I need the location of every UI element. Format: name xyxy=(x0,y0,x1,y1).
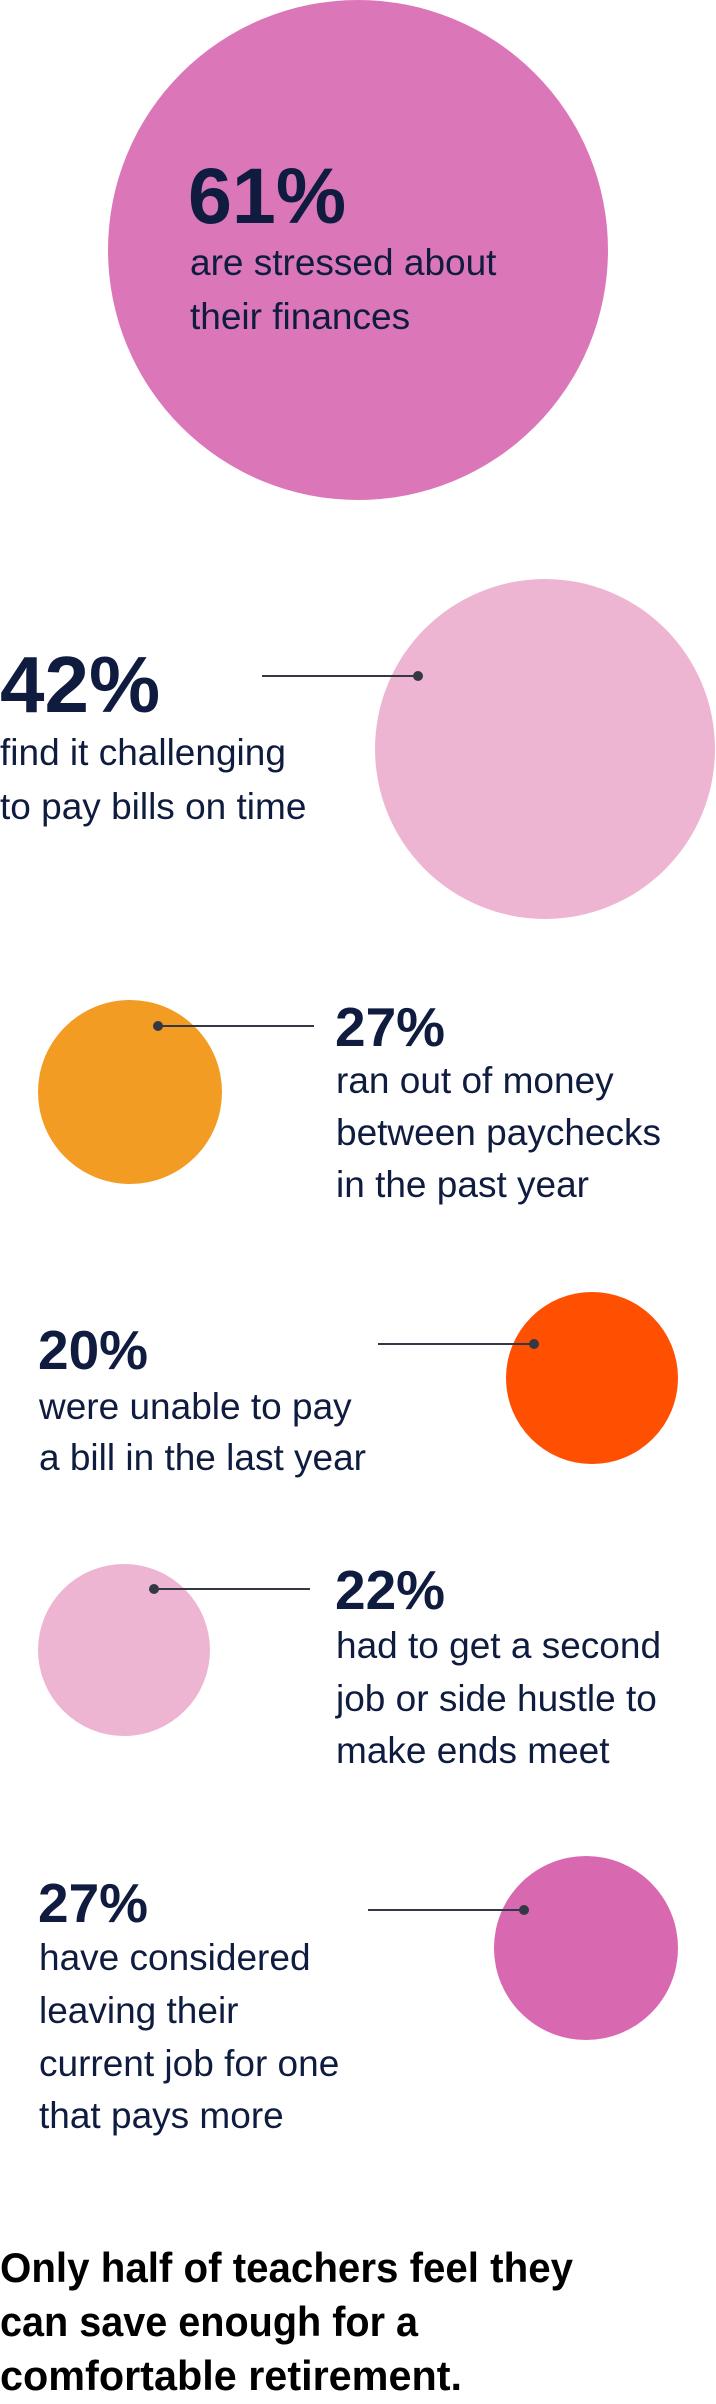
text: 61%: are stressed about xyxy=(190,242,497,283)
text: 22%: job or side hustle to xyxy=(335,1678,657,1719)
text: 27% leaving: leaving their xyxy=(39,1990,239,2031)
text: 27% leaving: current job for one xyxy=(39,2043,339,2084)
text: 27% leaving: that pays more xyxy=(39,2095,284,2136)
text: 27% leaving: 27% xyxy=(38,1872,148,1934)
stat: 22% xyxy=(38,1559,661,1771)
connector line: red xyxy=(378,1339,539,1349)
text: 27%: between paychecks xyxy=(336,1112,661,1153)
text: 42%: find it challenging xyxy=(0,732,286,773)
text: 20% xyxy=(38,1319,366,1478)
stat: 42% xyxy=(0,579,715,919)
text: 42% xyxy=(0,640,306,827)
text: 27% leaving: have considered xyxy=(39,1937,311,1978)
text: 27% xyxy=(335,996,661,1205)
footer statement xyxy=(0,2244,574,2399)
text: 27% leaving xyxy=(38,1872,339,2136)
stat: 61% xyxy=(108,0,608,500)
text: 22% xyxy=(335,1559,661,1771)
text: 20%: were unable to pay xyxy=(38,1386,352,1427)
stat: 27% leaving xyxy=(38,1856,678,2136)
stat: 27% ran out xyxy=(38,996,661,1205)
connector line: 42% xyxy=(262,671,423,681)
connector line: light pink xyxy=(149,1584,310,1594)
text: 42%: to pay bills on time xyxy=(0,786,306,827)
text: 27%: ran out of money xyxy=(336,1060,614,1101)
footer statement: Only half of teachers feel they xyxy=(0,2244,574,2291)
text: 22%: had to get a second xyxy=(336,1625,661,1666)
circle: red xyxy=(506,1292,678,1464)
connector line: orange xyxy=(153,1021,314,1031)
text: 20%: a bill in the last year xyxy=(39,1437,366,1478)
footer statement: can save enough for a xyxy=(0,2298,419,2345)
connector line: magenta xyxy=(368,1905,529,1915)
text: 61%: their finances xyxy=(190,296,410,337)
circle: orange xyxy=(38,1000,222,1184)
circle: 61% xyxy=(108,0,608,500)
text: 27%: in the past year xyxy=(336,1164,589,1205)
text: 22%: make ends meet xyxy=(336,1730,610,1771)
text: 61% xyxy=(188,151,497,337)
text: 42%: 42% xyxy=(0,640,160,729)
text: 22%: 22% xyxy=(335,1559,445,1621)
circle: 42% xyxy=(375,579,715,919)
circle: magenta xyxy=(494,1856,678,2040)
footer statement: comfortable retirement. xyxy=(0,2352,462,2399)
text: 27%: 27% xyxy=(335,996,445,1058)
text: 61%: 61% xyxy=(188,151,346,240)
text: 20%: 20% xyxy=(38,1319,148,1381)
circle: light pink xyxy=(38,1564,210,1736)
stat: 20% xyxy=(38,1292,678,1478)
